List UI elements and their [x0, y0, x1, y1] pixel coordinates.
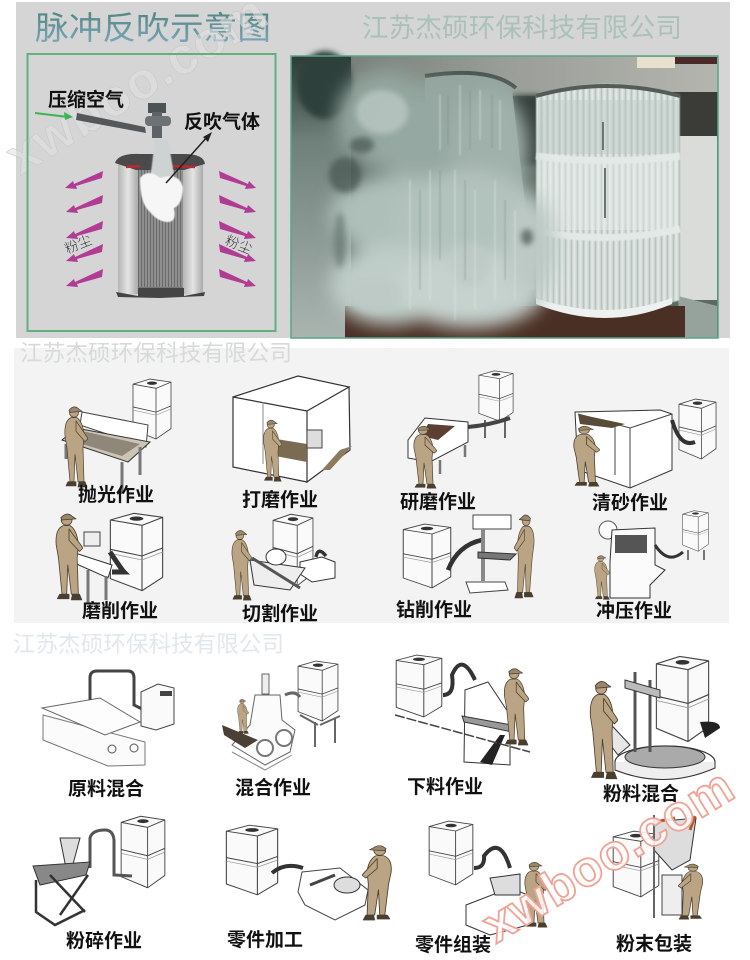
arrows: dust flow right	[219, 171, 256, 287]
photo border	[291, 56, 718, 338]
company name watermark: lower: 江苏杰硕环保科技有限公司	[13, 632, 284, 657]
label: 零件加工	[227, 929, 303, 951]
label: 抛光作业	[78, 484, 154, 506]
label: 零件组装	[415, 934, 491, 956]
label: 粉末包装	[616, 933, 692, 955]
dust cloud	[330, 70, 555, 328]
heading: pulse back-blow diagram: 脉冲反吹示意图	[35, 10, 271, 46]
label: compressed air: 压缩空气	[48, 88, 124, 111]
scene: powder mixing	[590, 656, 720, 805]
scene: grinding booth	[233, 376, 352, 511]
scene: polishing	[62, 379, 171, 506]
ceiling and walls	[291, 51, 718, 338]
label: 下料作业	[407, 776, 483, 798]
panel: pulse diagram frame	[28, 54, 276, 331]
company name watermark: middle: 江苏杰硕环保科技有限公司	[20, 341, 292, 366]
scene: blanking	[395, 655, 530, 798]
scene: sand cleaning	[574, 399, 716, 514]
scene: raw material mixing	[42, 671, 174, 800]
label: 冲压作业	[596, 600, 672, 622]
label: 粉料混合	[603, 783, 679, 805]
scene: crushing	[33, 816, 165, 952]
scene: drilling	[396, 515, 534, 621]
dust cloud vertical streaks	[410, 85, 515, 320]
label: dust left: 粉尘	[62, 231, 94, 257]
label: 混合作业	[235, 777, 311, 799]
dust cloud highlights	[347, 90, 490, 313]
label: 粉碎作业	[66, 930, 142, 952]
panel: workplace applications upper	[14, 348, 729, 625]
scene: parts assembly	[415, 821, 548, 956]
panel: pulse diagram background	[16, 2, 730, 338]
label: 钻削作业	[396, 599, 472, 621]
arrows: dust flow left	[65, 171, 103, 287]
photo: pulse cleaning in filter cartridges	[291, 51, 718, 338]
company name watermark: top: 江苏杰硕环保科技有限公司	[362, 13, 682, 43]
arrow: back-blow gas	[166, 132, 212, 183]
scene: cutting grinding	[56, 513, 163, 622]
arrow: green compressed air	[35, 112, 73, 120]
label: 打磨作业	[242, 489, 318, 511]
scene: mixing work	[222, 661, 340, 799]
label: dust right: 粉尘	[223, 232, 255, 257]
label: 研磨作业	[400, 491, 476, 513]
label: 原料混合	[68, 778, 144, 800]
scene: stamping	[595, 511, 708, 622]
icon: pulse air cloud	[140, 140, 183, 222]
filter cartridge right	[536, 84, 680, 318]
icon: pulse filter cartridge	[115, 154, 205, 298]
scene: cutting	[232, 514, 335, 625]
label: 切割作业	[242, 603, 318, 625]
scene: parts processing	[226, 825, 391, 951]
panel: workplace applications lower	[33, 655, 720, 956]
label: 清砂作业	[592, 492, 668, 514]
icon: blowpipe	[76, 103, 171, 138]
label: back-blow gas: 反吹气体	[184, 111, 260, 133]
dust cloud dark patches	[329, 137, 533, 268]
scene: powder packaging	[613, 815, 703, 955]
scene: abrasive grinding	[400, 371, 513, 513]
watermark: xwboo.com bottom right: xwboo.com	[472, 757, 744, 953]
label: 磨削作业	[82, 600, 158, 622]
filter cartridge left in dust	[425, 72, 535, 300]
